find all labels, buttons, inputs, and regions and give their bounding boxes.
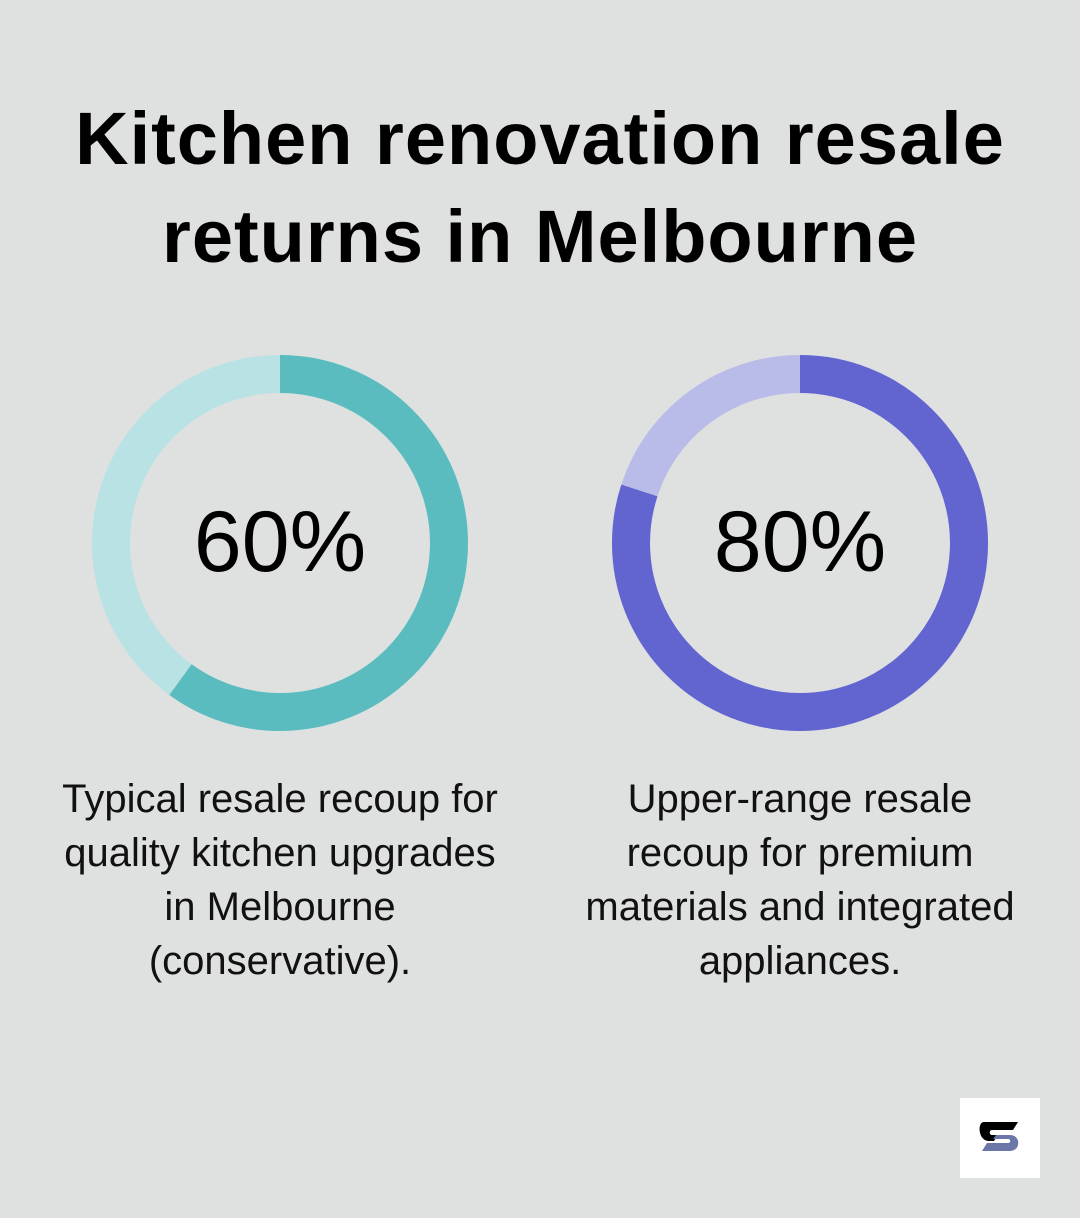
description right: recoup for premium (627, 831, 973, 875)
title (75, 97, 1005, 278)
description left: (conservative). (149, 939, 411, 983)
description right (585, 777, 1015, 983)
donut: 60% (111, 374, 449, 712)
logo (960, 1098, 1040, 1178)
description right: Upper-range resale (628, 777, 972, 821)
description left: Typical resale recoup for (62, 777, 498, 821)
donut: 80% (631, 374, 969, 712)
description left: in Melbourne (164, 885, 396, 929)
title: Kitchen renovation resale (75, 97, 1005, 180)
description right: appliances. (699, 939, 901, 983)
title: returns in Melbourne (162, 195, 918, 278)
donut: 80%: 80% (714, 494, 886, 590)
donut: 60%: 60% (194, 494, 366, 590)
description left: quality kitchen upgrades (64, 831, 496, 875)
description left (62, 777, 498, 983)
description right: materials and integrated (585, 885, 1015, 929)
